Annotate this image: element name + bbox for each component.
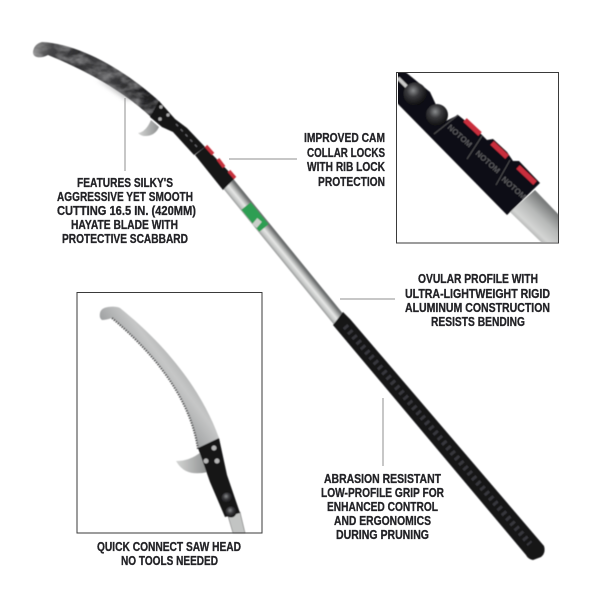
- main product: pole saw: [30, 38, 545, 560]
- text: quick connect caption: NO TOOLS NEEDED: [121, 554, 218, 568]
- text: quick connect caption: [97, 540, 241, 568]
- text: cam collar feature: [304, 131, 385, 189]
- text: grip feature: [321, 472, 444, 542]
- red lock strips: [465, 120, 535, 183]
- aluminum pole: [226, 181, 340, 321]
- text: blade feature: [57, 176, 196, 246]
- saw head bracket: [150, 101, 205, 155]
- close-up pole: [228, 512, 245, 533]
- knobs: [222, 492, 236, 518]
- text: cam collar feature: PROTECTION: [318, 175, 385, 189]
- cam collars: [195, 146, 235, 190]
- text: cam collar feature: COLLAR LOCKS: [307, 146, 385, 160]
- text: aluminum feature: RESISTS BENDING: [431, 315, 525, 329]
- text: blade feature: CUTTING 16.5 IN. (420MM): [57, 204, 196, 218]
- text: grip feature: LOW-PROFILE GRIP FOR: [321, 486, 444, 500]
- close-up collar body: [395, 70, 540, 215]
- collar markings: NOTOM: [474, 149, 502, 176]
- leader line: pole: [340, 298, 395, 300]
- text: aluminum feature: [405, 272, 550, 329]
- panel: cam collar close-up: [395, 70, 560, 243]
- green label: [246, 206, 264, 228]
- text: blade feature: AGGRESSIVE YET SMOOTH: [57, 190, 193, 204]
- text: grip feature: ENHANCED CONTROL: [327, 500, 438, 514]
- close-up blade: [100, 307, 219, 449]
- blade teeth: [112, 318, 198, 449]
- collar markings: NOTOM: [446, 123, 474, 150]
- leader line: collar: [229, 158, 297, 160]
- text: quick connect caption: QUICK CONNECT SAW HEAD: [97, 540, 241, 554]
- rubber grip: [333, 312, 545, 560]
- text: aluminum feature: ULTRA-LIGHTWEIGHT RIGID: [405, 287, 550, 301]
- text: grip feature: DURING PRUNING: [336, 528, 429, 542]
- panel: saw head close-up: [77, 292, 262, 533]
- text: aluminum feature: OVULAR PROFILE WITH: [418, 272, 538, 286]
- text: blade feature: HAYATE BLADE WITH: [71, 218, 178, 232]
- blade hook: [138, 120, 159, 136]
- scabbard: [30, 38, 165, 122]
- bracket: [198, 438, 240, 517]
- text: aluminum feature: ALUMINUM CONSTRUCTION: [405, 301, 550, 315]
- blade hook: [176, 452, 208, 473]
- collar divider ridges: [434, 115, 510, 185]
- text: grip feature: AND ERGONOMICS: [334, 514, 431, 528]
- close-up pole: [510, 190, 560, 243]
- knobs: [404, 82, 448, 126]
- text: grip feature: ABRASION RESISTANT: [324, 472, 441, 486]
- leader line: grip: [382, 398, 384, 466]
- text: blade feature: PROTECTIVE SCABBARD: [62, 232, 188, 246]
- collar markings: NOTOM: [500, 175, 528, 202]
- leader line: blade: [124, 98, 126, 171]
- collar markings: [446, 123, 528, 202]
- text: blade feature: FEATURES SILKY'S: [77, 176, 173, 190]
- text: cam collar feature: WITH RIB LOCK: [307, 160, 385, 174]
- text: cam collar feature: IMPROVED CAM: [304, 131, 385, 145]
